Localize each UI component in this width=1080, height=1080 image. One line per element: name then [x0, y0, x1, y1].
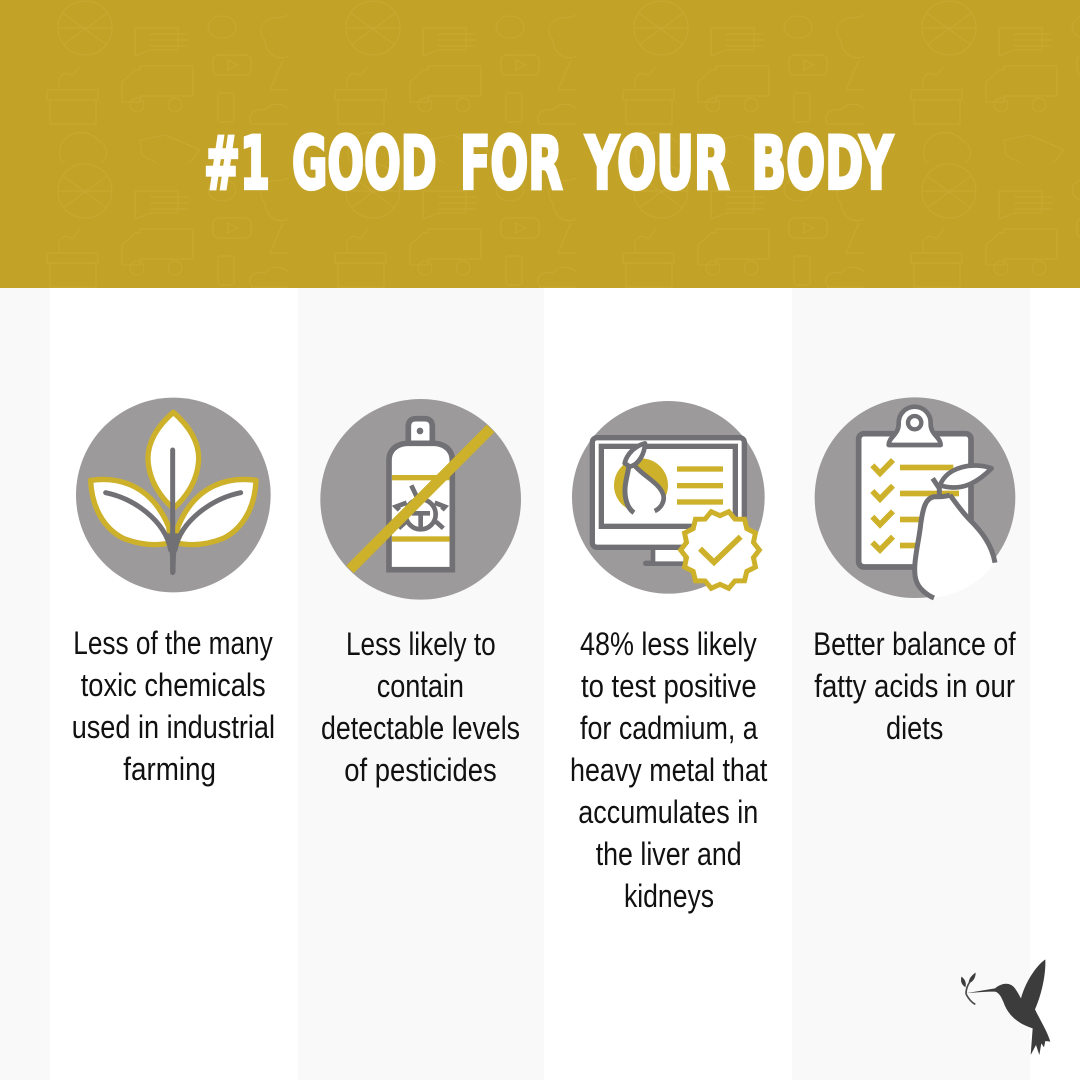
icon: crossed-out spray can	[320, 399, 521, 600]
icon: monitor with pear and approval badge	[572, 401, 765, 594]
title	[204, 121, 894, 206]
icon: plant	[76, 398, 271, 592]
panel: fatty acids	[813, 397, 1016, 746]
text: cadmium: 48% less likely	[580, 626, 757, 662]
icon: hummingbird logo	[961, 959, 1050, 1055]
panel: toxic chemicals	[72, 398, 275, 787]
text: pesticides: of pesticides	[344, 752, 497, 788]
title: #1	[204, 121, 270, 206]
text: toxic chemicals: Less of the many	[73, 625, 273, 661]
text: fatty acids: diets	[886, 710, 943, 746]
text: pesticides	[321, 626, 520, 788]
panel: pesticides	[320, 399, 521, 788]
text: cadmium	[570, 626, 767, 914]
text: pesticides: detectable levels	[321, 710, 520, 746]
panel: cadmium	[570, 401, 767, 914]
text: fatty acids	[813, 626, 1016, 746]
text: toxic chemicals: toxic chemicals	[81, 667, 266, 703]
title: FOR	[460, 121, 563, 206]
text: toxic chemicals: farming	[123, 751, 216, 787]
icon: clipboard with pear	[815, 397, 1015, 598]
text: toxic chemicals	[72, 625, 275, 787]
text: cadmium: to test positive	[581, 668, 757, 704]
title: BODY	[751, 121, 894, 206]
text: cadmium: kidneys	[624, 878, 714, 914]
text: pesticides: contain	[377, 668, 464, 704]
title: YOUR	[585, 121, 730, 206]
text: fatty acids: Better balance of	[813, 626, 1016, 662]
text: fatty acids: fatty acids in our	[814, 668, 1015, 704]
text: pesticides: Less likely to	[346, 626, 496, 662]
text: cadmium: for cadmium, a	[580, 710, 758, 746]
text: cadmium: accumulates in	[578, 794, 758, 830]
title: GOOD	[292, 121, 437, 206]
text: cadmium: heavy metal that	[570, 752, 767, 788]
text: cadmium: the liver and	[596, 836, 742, 872]
text: toxic chemicals: used in industrial	[72, 709, 275, 745]
header banner	[0, 0, 1080, 288]
